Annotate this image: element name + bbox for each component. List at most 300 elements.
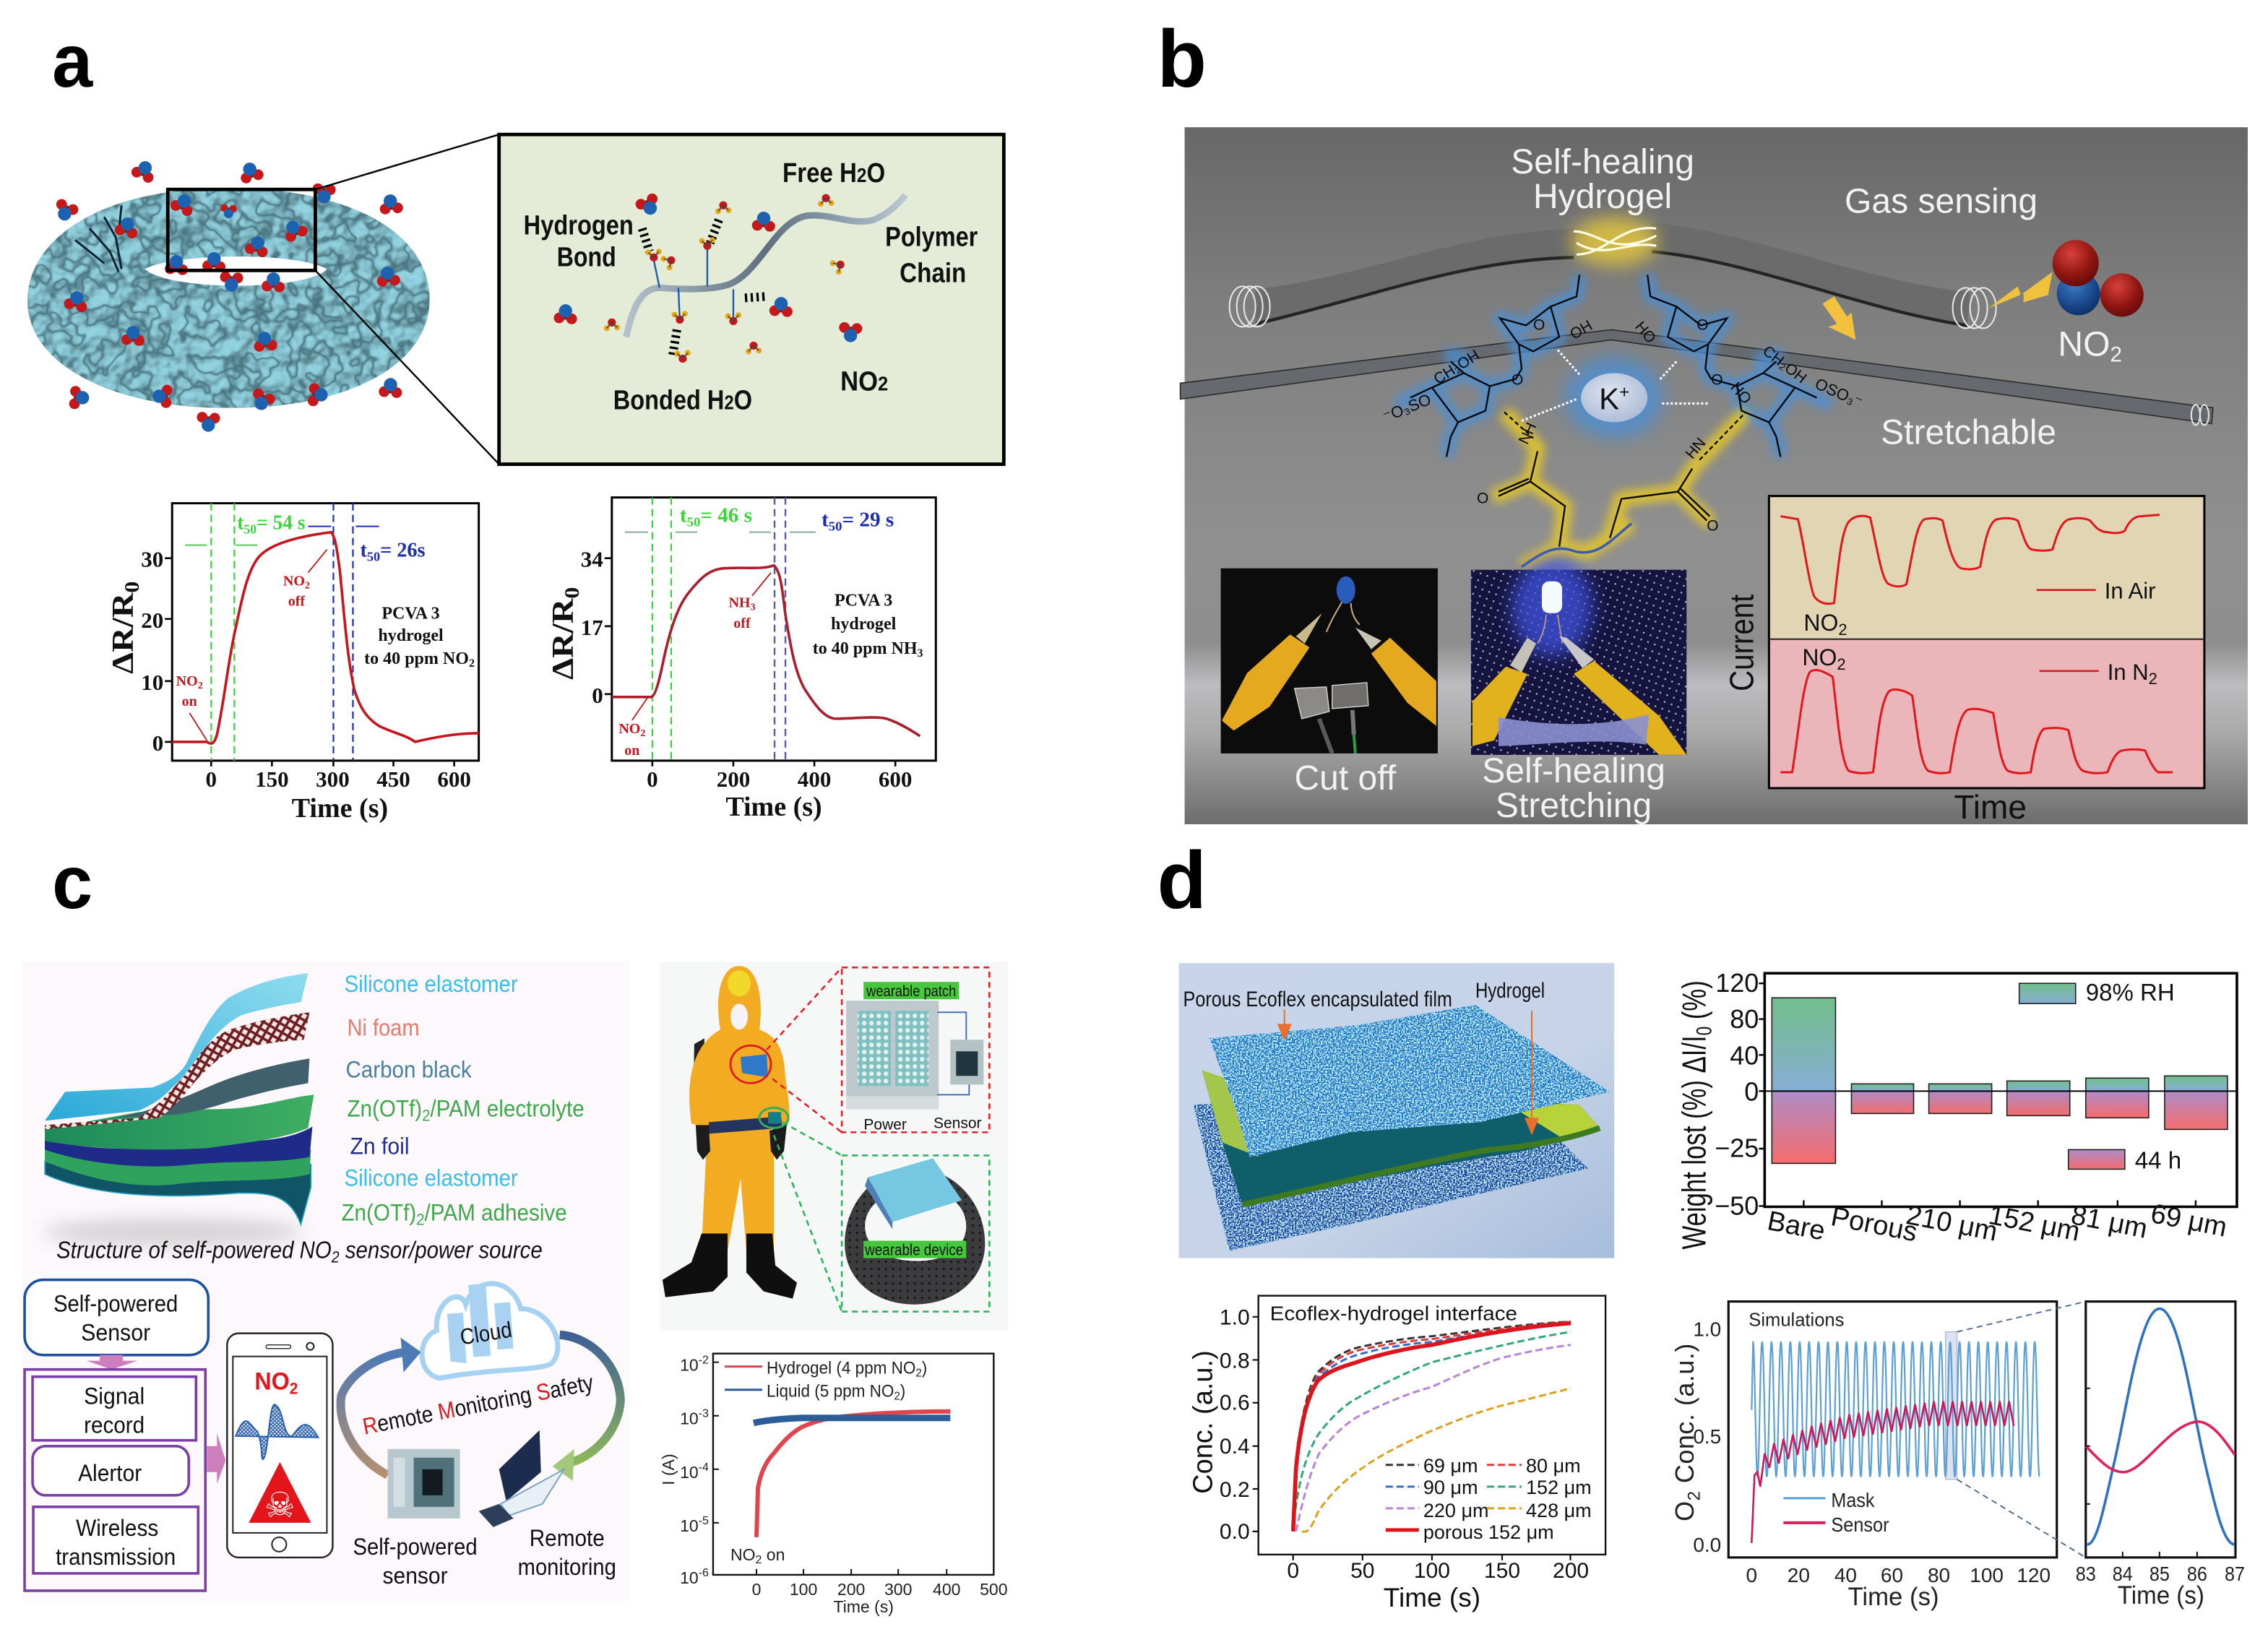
orange arrows xyxy=(1285,1009,1532,1120)
axis numbers: 150 xyxy=(1484,1559,1520,1583)
chart: NH3 response: to 40 ppm NH xyxy=(813,639,918,658)
hydrogen bonds xyxy=(642,220,767,355)
coil ends xyxy=(1230,286,2209,426)
panel letter c: c xyxy=(52,841,92,925)
chart: NH3 response: NH xyxy=(728,595,750,611)
legend: ) xyxy=(922,1359,927,1378)
inset labels: Chain xyxy=(900,258,966,288)
axis numbers: 83 xyxy=(2076,1563,2096,1585)
chemical labels: CH₂OH xyxy=(1431,347,1483,388)
chemical labels: HO xyxy=(1727,379,1754,407)
chemical labels: O xyxy=(1512,371,1523,388)
panel letter d: d xyxy=(1157,835,1207,925)
chemical labels: OSO₃⁻ xyxy=(1812,374,1866,411)
layer labels: Zn foil xyxy=(350,1133,410,1159)
chart: NH3 response: ΔR/R xyxy=(547,608,580,680)
curve legend: 152 μm xyxy=(1526,1477,1592,1498)
chemical labels: O xyxy=(1477,491,1488,507)
chemical labels: O xyxy=(1696,316,1709,333)
inset labels: NO2 xyxy=(840,366,888,397)
axis numbers: 200 xyxy=(1553,1559,1589,1583)
legend: Hydrogel (4 ppm NO xyxy=(767,1359,926,1378)
axis numbers: 40 xyxy=(1834,1564,1857,1586)
self-powered sensor box: Sensor xyxy=(81,1320,151,1346)
layer labels: 2 xyxy=(416,1210,425,1228)
axis numbers: 17 xyxy=(581,615,603,640)
torus illustration xyxy=(27,188,430,408)
bar chart xyxy=(1675,968,2237,1250)
axis labels: 100 xyxy=(790,1580,817,1599)
chart: NO2 response xyxy=(107,504,479,824)
layered film illustration: Hydrogel xyxy=(1475,979,1545,1003)
inset labels: Free H2O xyxy=(782,158,885,189)
chart: NH3 response: 3 xyxy=(918,647,923,660)
b labels: Hydrogel xyxy=(1533,178,1672,216)
panel letter a: a xyxy=(52,20,93,103)
chart: NO2 response: 0 xyxy=(121,582,144,593)
axis numbers: 87 xyxy=(2225,1563,2245,1585)
legend xyxy=(1783,1498,1825,1499)
wearable patch detail: Sensor xyxy=(933,1115,982,1131)
lower stretchable strip xyxy=(1181,329,2213,424)
axis numbers: 100 xyxy=(1970,1564,2004,1586)
ticks xyxy=(165,558,454,766)
layer labels: Zn(OTf) xyxy=(347,1095,428,1121)
NO2 molecule with lightning xyxy=(1989,240,2144,316)
curve legend xyxy=(1386,1455,1592,1543)
water and NO2 molecules in inset xyxy=(554,191,862,363)
axis numbers: 200 xyxy=(717,766,750,792)
axis title: 0 xyxy=(1692,1027,1716,1035)
axes frame xyxy=(1764,973,2237,1206)
value axis numbers: −25 xyxy=(1715,1133,1759,1162)
workflow labels: sensor xyxy=(383,1563,448,1589)
annotations: 50 xyxy=(687,515,700,530)
O2 simulation chart xyxy=(1670,1302,2057,1611)
wearable wrist device xyxy=(845,1158,985,1305)
air curve xyxy=(1780,515,2160,604)
axis numbers: 0.5 xyxy=(1693,1425,1721,1448)
bar chart: 44 h xyxy=(2135,1146,2181,1173)
bar category labels: 210 μm xyxy=(1904,1200,2000,1248)
b labels: Self-healing xyxy=(1482,752,1665,790)
potassium ion: + xyxy=(1619,382,1629,402)
arrows xyxy=(625,532,816,533)
chart: NH3 response xyxy=(547,498,936,822)
ticks xyxy=(605,558,895,766)
grey background xyxy=(1185,127,2248,824)
current chart: In N xyxy=(2108,660,2149,685)
sensor curve xyxy=(1751,1401,2014,1543)
axis title: Weight lost (%) ΔI/I xyxy=(1675,965,1712,1250)
wearable patch detail xyxy=(846,982,983,1133)
processing stack xyxy=(25,1370,205,1591)
chemical labels: O xyxy=(1711,371,1723,388)
blue glow of sugar units xyxy=(1396,275,1831,457)
curve legend: 90 μm xyxy=(1423,1477,1478,1498)
current chart: 2 xyxy=(1837,655,1846,673)
chart: NO2 response: 2 xyxy=(305,581,310,592)
axis numbers: 0.2 xyxy=(1220,1478,1250,1502)
film labels: Porous Ecoflex encapsulated film xyxy=(1183,988,1452,1011)
self-powered sensor box xyxy=(25,1280,208,1355)
axis labels: I (A) xyxy=(659,1454,678,1485)
smartphone: NO xyxy=(254,1368,291,1396)
chart: NO2 response: NO xyxy=(283,574,305,589)
structure caption: Structure of self-powered NO xyxy=(56,1237,366,1264)
pink arrow down xyxy=(87,1355,137,1370)
panel c: self-powered NO2 sensor xyxy=(22,841,1008,1616)
inset labels: Polymer xyxy=(885,222,978,252)
chart: NH3 response: 50 xyxy=(829,519,842,534)
chart: NO2 response: PCVA 3 xyxy=(381,605,440,623)
axis numbers: 150 xyxy=(255,766,289,792)
axis titles: Time (s) xyxy=(1384,1582,1480,1612)
legend xyxy=(2019,983,2076,1003)
processing stack: Alertor xyxy=(78,1460,142,1486)
axis labels: 10 xyxy=(680,1568,699,1587)
axis numbers: 0 xyxy=(152,730,163,756)
photo: self-healing stretching xyxy=(1471,558,1686,755)
axis numbers: 0.8 xyxy=(1220,1349,1250,1373)
b labels: Gas sensing xyxy=(1845,182,2038,220)
O2 simulation chart: Mask xyxy=(1831,1489,1875,1511)
current chart: NO xyxy=(1803,610,1838,636)
layer labels: 2 xyxy=(422,1106,430,1124)
axis labels: 10 xyxy=(680,1463,699,1482)
axis numbers: 34 xyxy=(581,547,603,572)
O2 simulation chart: Conc. (a.u.) xyxy=(1670,1344,1699,1491)
ticks xyxy=(713,1362,947,1575)
axis labels: NO xyxy=(730,1545,755,1564)
protective suit figure panel xyxy=(660,962,1008,1331)
laptop xyxy=(479,1430,564,1527)
annotations: t xyxy=(237,512,244,535)
axis labels: -2 xyxy=(699,1355,709,1367)
axis numbers xyxy=(581,547,912,792)
legend xyxy=(725,1359,927,1403)
wearable wrist device: wearable device xyxy=(864,1241,963,1259)
curve legend: 69 μm xyxy=(1423,1455,1478,1477)
axis titles: Time (s) xyxy=(292,793,388,824)
response curve xyxy=(172,532,479,743)
axis numbers: 10 xyxy=(141,670,163,695)
axis numbers: 0.0 xyxy=(1220,1520,1250,1544)
axis numbers: 50 xyxy=(1350,1559,1374,1583)
axis title: (%) xyxy=(1675,980,1712,1027)
hydrogel curve xyxy=(756,1412,950,1537)
cloud: Cloud xyxy=(458,1317,514,1350)
layer labels: Ni foam xyxy=(347,1014,420,1040)
axis labels: on xyxy=(762,1545,785,1564)
annotations: 50 xyxy=(243,522,256,537)
blue curve xyxy=(2087,1309,2235,1545)
bar category labels xyxy=(1765,1198,2230,1248)
value axis numbers: 40 xyxy=(1730,1040,1759,1070)
b labels: Stretching xyxy=(1496,787,1652,825)
axis labels: 300 xyxy=(884,1580,912,1599)
chart: NO2 response: NO xyxy=(176,673,198,689)
yellow glow of amide groups xyxy=(1493,413,1746,567)
inset labels xyxy=(524,158,978,415)
inset panel: polymer chain with bound water xyxy=(499,134,1004,465)
current chart: Time xyxy=(1954,788,2027,826)
axis numbers: 20 xyxy=(1788,1564,1810,1586)
layered device structure xyxy=(43,973,314,1247)
axis numbers: 1.0 xyxy=(1693,1318,1721,1341)
workflow labels: Remote xyxy=(530,1525,605,1551)
chart caption: Simulations xyxy=(1749,1309,1844,1331)
chemical labels: OH xyxy=(1567,317,1595,343)
value axis numbers: 0 xyxy=(1744,1076,1759,1106)
axis numbers: 120 xyxy=(2017,1564,2051,1586)
zoom rectangle and leader lines xyxy=(168,134,499,465)
red curve xyxy=(2086,1422,2235,1472)
legend: 2 xyxy=(894,1391,900,1403)
bar category labels: 69 μm xyxy=(2148,1198,2230,1243)
axis numbers: 0 xyxy=(592,683,603,708)
potassium ion xyxy=(1565,357,1663,439)
structure caption: sensor/power source xyxy=(340,1237,543,1264)
axis labels: -5 xyxy=(699,1515,709,1527)
chart: NH3 response: NO xyxy=(618,721,640,737)
NO2 molecules around torus xyxy=(51,157,404,432)
axis labels: -6 xyxy=(699,1567,709,1579)
chart: NO2 response: ΔR/R xyxy=(107,602,140,674)
chemical labels: HN xyxy=(1682,435,1709,462)
layer labels: Silicone elastomer xyxy=(344,1165,518,1191)
axis numbers: 600 xyxy=(879,766,912,792)
layer labels xyxy=(341,971,585,1228)
axis numbers xyxy=(1220,1306,1589,1583)
wearable patch detail: wearable patch xyxy=(866,983,956,1000)
bar category labels: 81 μm xyxy=(2069,1200,2150,1245)
chart: NH3 response: on xyxy=(624,743,639,759)
left light background xyxy=(22,962,629,1601)
guides xyxy=(211,504,234,761)
layer labels: Zn(OTf) xyxy=(341,1199,423,1225)
axis labels: 10 xyxy=(680,1356,699,1375)
O2 simulation chart: 2 xyxy=(1684,1491,1704,1500)
current chart: 2 xyxy=(1838,621,1847,639)
axis titles: Time (s) xyxy=(725,792,822,822)
axis labels: 10 xyxy=(680,1516,699,1535)
b labels: NO xyxy=(2058,325,2110,363)
inset labels: Bonded H2O xyxy=(613,386,752,415)
axis numbers: 0 xyxy=(1746,1564,1757,1586)
pink arrow right xyxy=(207,1433,225,1484)
axis numbers: 0.6 xyxy=(1220,1391,1250,1415)
chart: NO2 response: 50 xyxy=(367,550,380,564)
circuit board xyxy=(388,1449,460,1519)
smartphone: 2 xyxy=(290,1380,298,1398)
axis numbers: 85 xyxy=(2150,1563,2170,1585)
current chart: 2 xyxy=(2149,670,2157,688)
bar category labels: 152 μm xyxy=(1986,1200,2082,1248)
chart: NO2 response: 2 xyxy=(469,657,475,670)
value axis numbers: 80 xyxy=(1730,1004,1759,1034)
axis numbers xyxy=(141,547,471,792)
value axis numbers: 120 xyxy=(1715,968,1759,998)
chart: NH3 response: t xyxy=(822,509,828,532)
chart: NH3 response: 0 xyxy=(561,587,584,599)
axis numbers: 0 xyxy=(206,766,217,792)
panel letter b: b xyxy=(1157,14,1207,104)
axis labels: 0 xyxy=(752,1580,761,1599)
layer labels: Carbon black xyxy=(345,1056,473,1082)
chart: NO2 response: 2 xyxy=(198,681,203,691)
guides xyxy=(652,498,671,761)
molecular skeleton xyxy=(1410,275,1816,567)
zoomed period chart xyxy=(1957,1302,2245,1610)
direction arrow xyxy=(1822,296,1855,340)
inset labels: Hydrogen xyxy=(524,210,634,241)
b labels: 2 xyxy=(2110,342,2122,366)
value axis numbers: −50 xyxy=(1715,1191,1759,1220)
axis numbers: 450 xyxy=(376,766,410,792)
axis numbers: 300 xyxy=(316,766,350,792)
polymer chain xyxy=(626,195,905,337)
axis numbers: 0 xyxy=(647,766,658,792)
processing stack: Wireless xyxy=(76,1515,158,1541)
cloud xyxy=(422,1282,558,1378)
b labels: Stretchable xyxy=(1881,414,2056,452)
axis numbers: 0.4 xyxy=(1220,1435,1250,1459)
response curve xyxy=(612,566,920,736)
chart: NH3 response: hydrogel xyxy=(831,615,897,634)
curve legend: porous 152 μm xyxy=(1423,1521,1554,1543)
processing stack: transmission xyxy=(56,1544,176,1570)
processing stack: Signal xyxy=(84,1383,145,1409)
potassium ion: K xyxy=(1599,382,1619,415)
axis numbers: 1.0 xyxy=(1220,1306,1250,1330)
chart: NO2 response: off xyxy=(288,594,305,610)
ionic interaction lines xyxy=(1522,350,1708,421)
annotations: = 46 s xyxy=(700,505,752,527)
zoom window xyxy=(1946,1332,1957,1480)
layered film illustration xyxy=(1179,963,1614,1258)
chart: NH3 response: off xyxy=(733,616,751,631)
current chart: Current xyxy=(1722,595,1760,691)
current chart xyxy=(1722,496,2204,826)
bound side groups xyxy=(654,249,733,321)
green dashed callout xyxy=(774,1122,989,1312)
panel d: porous encapsulated hydrogel xyxy=(1157,835,2245,1612)
axis labels: -4 xyxy=(699,1461,709,1474)
axis labels: -3 xyxy=(699,1408,709,1420)
axis numbers: 30 xyxy=(141,547,163,572)
upper tube xyxy=(1256,228,1577,324)
axis numbers: 86 xyxy=(2187,1563,2207,1585)
ticks xyxy=(1759,983,2196,1206)
tube edge shadows xyxy=(1256,251,1967,325)
chemical labels: NH xyxy=(1516,420,1540,447)
annotations: t xyxy=(680,505,686,527)
axis numbers: 100 xyxy=(1414,1559,1450,1583)
mask curve xyxy=(1751,1342,2040,1477)
processing stack: record xyxy=(84,1412,145,1438)
axis numbers: 84 xyxy=(2113,1563,2133,1585)
self-powered sensor box: Self-powered xyxy=(53,1291,178,1317)
axis numbers: 60 xyxy=(1881,1564,1903,1586)
axis numbers: 0 xyxy=(1287,1559,1299,1583)
axis labels xyxy=(659,1355,1008,1616)
smartphone: ☠ xyxy=(264,1485,296,1526)
ticks xyxy=(1253,1317,1570,1560)
concentration chart xyxy=(1189,1296,1605,1612)
bar category labels: Porous xyxy=(1829,1201,1920,1248)
chart: NH3 response: 3 xyxy=(750,602,755,613)
axis labels: Time (s) xyxy=(833,1597,894,1616)
panel a: hydrogel torus and response curves xyxy=(27,20,1004,824)
bar chart: 98% RH xyxy=(2086,979,2175,1006)
workflow labels: monitoring xyxy=(518,1554,616,1580)
photo: cut off xyxy=(1221,569,1438,753)
concentration chart: Conc. (a.u.) xyxy=(1189,1350,1219,1494)
inset labels: Bond xyxy=(557,242,616,272)
smartphone xyxy=(227,1334,332,1558)
log current chart xyxy=(659,1354,1008,1616)
panel b: self-healing stretchable hydrogel sensor xyxy=(1157,14,2248,826)
arrows xyxy=(185,545,257,546)
current chart: NO xyxy=(1802,644,1837,670)
layer labels: Silicone elastomer xyxy=(344,971,518,997)
solid red curve xyxy=(1293,1323,1571,1532)
axis labels: 2 xyxy=(755,1554,762,1566)
zoom leader lines xyxy=(1957,1302,2086,1558)
wearable patch detail: Power xyxy=(863,1116,907,1133)
current chart: In Air xyxy=(2105,579,2155,604)
O2 simulation chart: O xyxy=(1670,1501,1699,1521)
curve legend: 428 μm xyxy=(1526,1500,1592,1521)
curve legend: 80 μm xyxy=(1526,1455,1581,1477)
healed junction glow xyxy=(1571,217,1657,266)
axis numbers xyxy=(2076,1563,2245,1585)
layer labels: /PAM electrolyte xyxy=(430,1095,585,1121)
chemical labels: HO xyxy=(1631,319,1659,347)
axis numbers: 400 xyxy=(798,766,831,792)
curve legend: 220 μm xyxy=(1423,1500,1489,1521)
legend: ) xyxy=(900,1382,905,1401)
chart: NH3 response: = 29 s xyxy=(842,509,894,532)
axis labels: 10 xyxy=(680,1409,699,1428)
bars xyxy=(1772,998,2228,1163)
workflow labels: Self-powered xyxy=(353,1534,478,1560)
chart legends xyxy=(2037,590,2099,671)
structure caption: 2 xyxy=(331,1248,340,1266)
ticks xyxy=(2086,1388,2197,1558)
curves xyxy=(1293,1322,1571,1532)
axis numbers: 0.0 xyxy=(1693,1534,1721,1556)
axis labels: 200 xyxy=(837,1580,865,1599)
b labels: Self-healing xyxy=(1511,143,1694,181)
chart: NH3 response: 2 xyxy=(640,728,645,739)
person xyxy=(663,966,797,1299)
chemical labels: ⁻O₃SO xyxy=(1380,390,1433,426)
axis labels: 400 xyxy=(933,1580,960,1599)
hydrogel strands xyxy=(1574,228,1656,254)
value axis numbers xyxy=(1715,968,1759,1220)
axis numbers xyxy=(1693,1318,2051,1586)
bar category labels: Bare xyxy=(1765,1206,1827,1247)
liquid curve xyxy=(754,1418,950,1423)
axis labels: 500 xyxy=(980,1580,1008,1599)
b labels xyxy=(1294,143,2122,825)
chart: NO2 response: to 40 ppm NO xyxy=(364,649,469,668)
axis title: Time (s) xyxy=(2118,1581,2204,1610)
chemical labels: CH₂OH xyxy=(1759,342,1810,386)
chemical labels xyxy=(1380,316,1866,535)
